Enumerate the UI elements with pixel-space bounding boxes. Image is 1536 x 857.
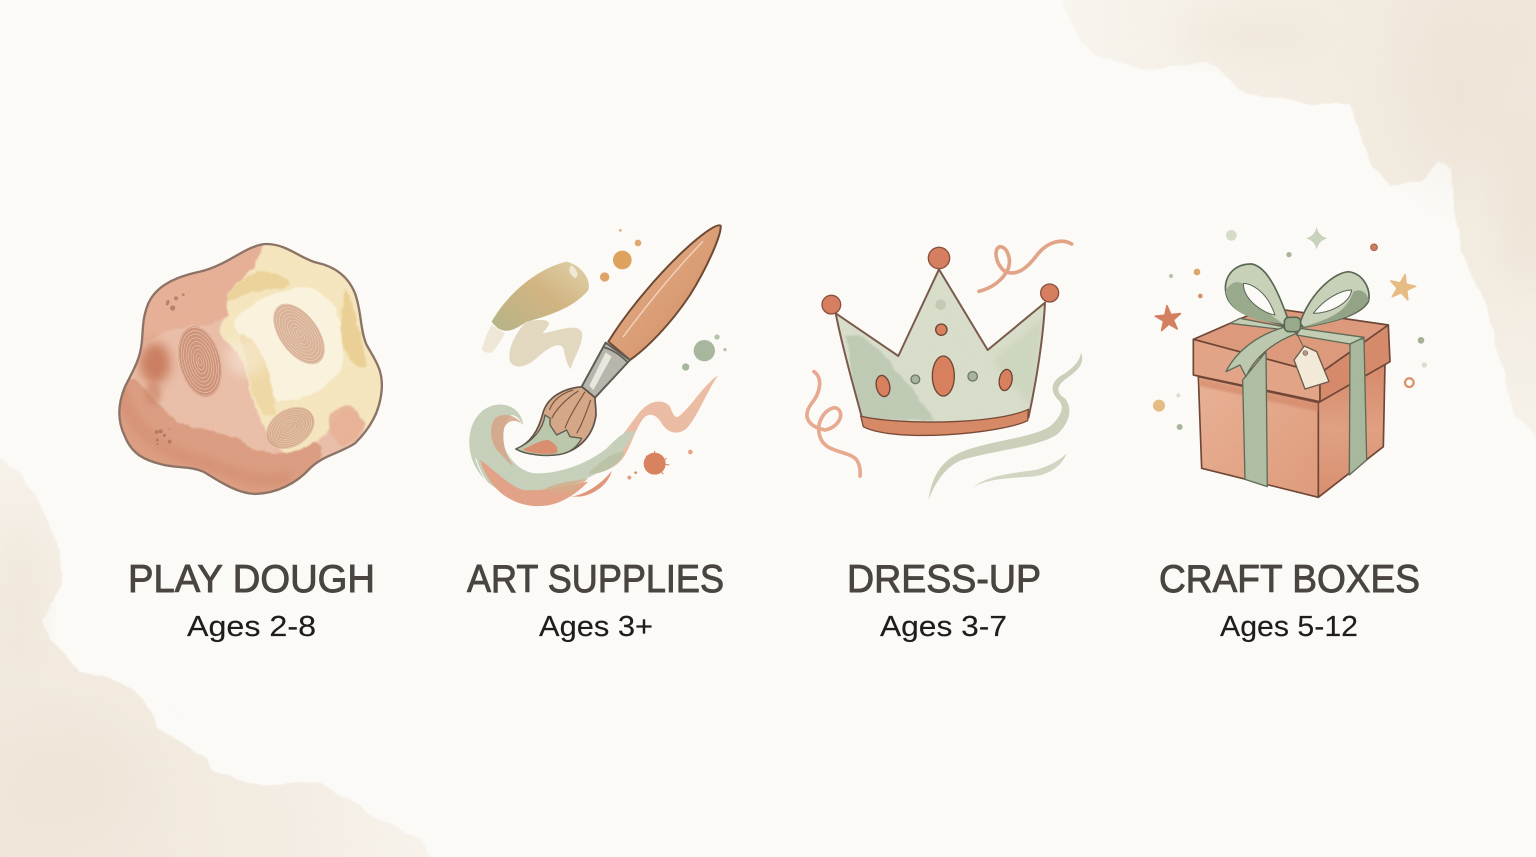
box body	[1198, 363, 1385, 497]
crown band	[861, 409, 1028, 435]
label: dress-up: DRESS-UP	[847, 558, 1041, 601]
icon: gift box	[1153, 227, 1427, 497]
crown finials	[822, 247, 1059, 314]
label: craft boxes: CRAFT BOXES	[1159, 558, 1420, 601]
ribbon straps	[1226, 318, 1367, 487]
icon: play dough	[110, 240, 387, 507]
label: craft boxes: Ages 5-12	[1220, 611, 1358, 643]
label: art supplies: Ages 3+	[539, 611, 653, 643]
ribbon bow	[1225, 264, 1369, 332]
crown gems	[874, 299, 1014, 398]
label: play dough	[128, 558, 375, 643]
ribbons	[807, 241, 1082, 500]
label: play dough: Ages 2-8	[187, 611, 316, 643]
label: dress-up: Ages 3-7	[880, 611, 1007, 643]
gift tag	[1294, 333, 1329, 389]
box shading	[1199, 378, 1318, 412]
icon: crown	[807, 241, 1082, 500]
label: play dough: PLAY DOUGH	[128, 558, 375, 601]
fingerprint marks	[171, 295, 335, 458]
speckles	[155, 293, 185, 445]
ochre paint smear	[482, 262, 589, 369]
label: craft boxes	[1159, 558, 1420, 643]
paint droplets	[600, 229, 727, 480]
brush ferrule	[582, 343, 630, 398]
label: art supplies	[467, 558, 724, 643]
brush bristles	[516, 387, 596, 455]
confetti stars and dots	[1153, 227, 1427, 430]
box lid	[1193, 307, 1390, 402]
watercolor wash: top right	[1058, 0, 1536, 450]
brush handle	[608, 225, 721, 360]
label: art supplies: ART SUPPLIES	[467, 558, 724, 601]
icon: paint brush and swirl	[469, 225, 727, 506]
watercolor wash: bottom left	[0, 452, 436, 857]
label: dress-up	[847, 558, 1041, 643]
green and terracotta swirl	[469, 375, 718, 506]
crown body	[836, 269, 1045, 424]
